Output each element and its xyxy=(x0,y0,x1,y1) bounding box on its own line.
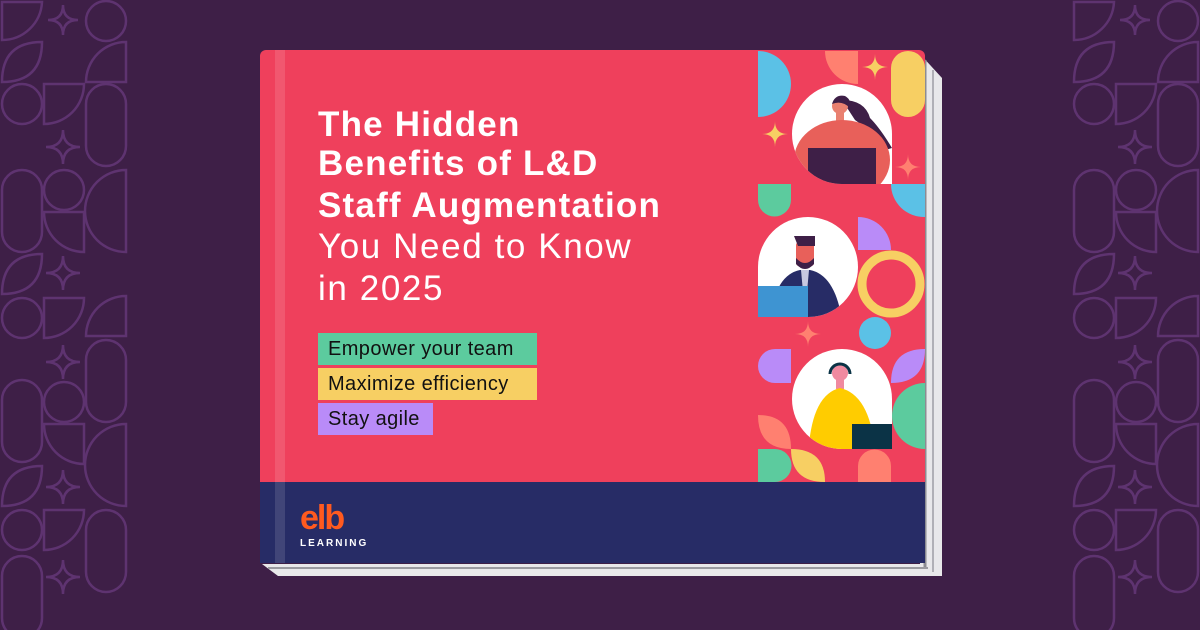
cover xyxy=(260,50,925,563)
title xyxy=(318,105,661,308)
text: in 2025 xyxy=(318,269,444,308)
text: Stay agile xyxy=(328,408,420,430)
tags xyxy=(318,333,537,435)
page stack xyxy=(262,54,942,576)
text: You Need to Know xyxy=(318,227,632,266)
logo: elb learning: LEARNING xyxy=(300,538,368,549)
text: The Hidden xyxy=(318,105,521,144)
person 1: woman with laptop xyxy=(792,84,892,184)
person 2: man in suit xyxy=(758,217,858,317)
logo: elb learning xyxy=(300,499,368,549)
text: Maximize efficiency xyxy=(328,373,509,395)
text: Staff Augmentation xyxy=(318,186,661,225)
text: Benefits of L&D xyxy=(318,144,598,183)
book xyxy=(260,50,942,576)
person 3: woman with headset xyxy=(792,349,892,449)
logo: elb learning: elb xyxy=(300,499,343,537)
text: Empower your team xyxy=(328,338,514,360)
